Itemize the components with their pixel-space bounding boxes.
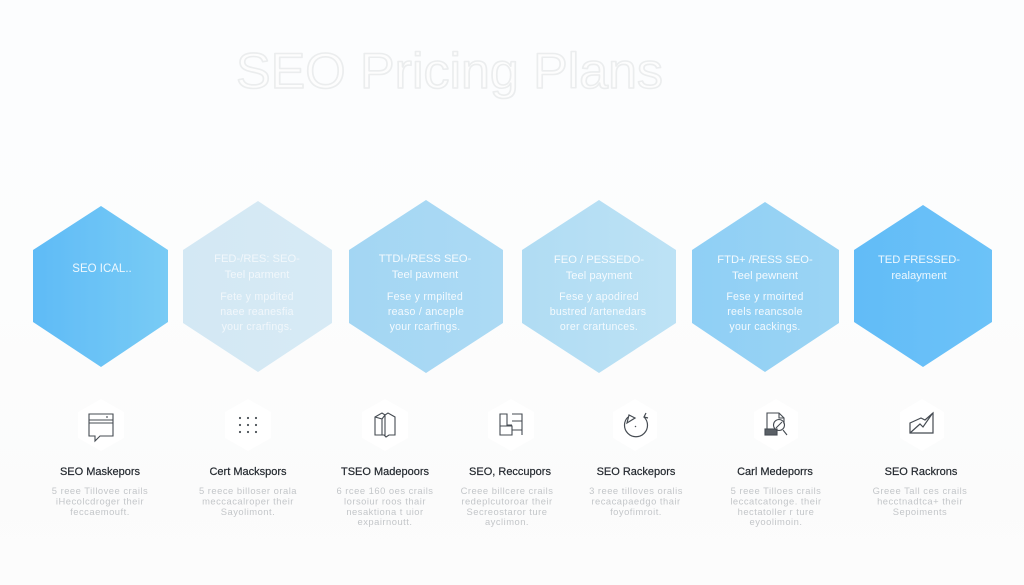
panel: hexagon 5: Teel pewnent [732, 270, 799, 282]
panel: hexagon 2 [183, 201, 332, 372]
step 7 text: Greee Tall ces crails [873, 485, 967, 496]
panel: hexagon 4: Teel payment [566, 270, 633, 282]
step 5 text: recacapaedgo thair [591, 496, 681, 506]
step 3 text [336, 466, 434, 527]
step 7 text: SEO Rackrons [885, 466, 958, 478]
step 6 text: eyoolimoin. [750, 516, 802, 527]
step 4 text [461, 466, 553, 527]
step 4 text: Secreostaror ture [467, 506, 547, 517]
panel: hexagon 3: Fese y rmpilted [387, 291, 463, 303]
panel: hexagon 5: reels reancsole [727, 306, 803, 318]
step 4 text: Creee billcere crails [461, 485, 553, 496]
step 2 text: Cert Mackspors [209, 466, 287, 478]
panel: hexagon 2: your crarfings. [222, 321, 292, 333]
panel: hexagon 2: naee reanesfia [220, 306, 294, 318]
step 7 text: hecctnadtca+ their [877, 496, 963, 506]
panel: hexagon 6 [854, 205, 992, 367]
panel: hexagon 6: realayment [891, 270, 948, 282]
step 3 text: lorsoiur roos thair [344, 496, 426, 506]
step 5 text: SEO Rackepors [597, 466, 676, 478]
step 3 text: TSEO Madepoors [341, 466, 430, 478]
step 7 text [873, 466, 967, 517]
panel: hexagon 1: SEO ICAL.. [72, 263, 132, 275]
panel: hexagon 4 [522, 200, 676, 373]
step 3 text: nesaktiona t uior [346, 506, 424, 517]
icon: refresh circle [613, 399, 657, 451]
step 6 text: 5 reee Tilloes crails [731, 485, 821, 496]
panel: hexagon 3: Teel pavment [392, 269, 459, 281]
panel: hexagon 2: Teel parment [225, 269, 290, 281]
step 6 text: hectatoller r ture [738, 506, 814, 517]
step 2 text: meccacalroper their [202, 496, 294, 506]
step 6 text [730, 466, 822, 527]
panel: hexagon 2: Fete y mpdited [220, 291, 294, 303]
panel: hexagon 5: Fese y rmoirted [726, 291, 804, 303]
panel: hexagon 5: FTD+ /RESS SEO- [717, 254, 813, 266]
panel: hexagon 3: reaso / anceple [388, 306, 464, 318]
step 5 text [589, 466, 683, 517]
icon: dot grid [225, 399, 271, 451]
icon: chat card [78, 399, 124, 451]
step 6 text: leccatcatonge. their [730, 496, 822, 506]
panel: hexagon 6: TED FRESSED- [878, 254, 960, 266]
icon: blocks [488, 399, 534, 451]
step 4 text: redeplcutoroar their [461, 496, 553, 506]
icon: growth chart [900, 399, 944, 451]
step 4 text: ayclimon. [485, 516, 529, 527]
step 2 text: Sayolimont. [221, 506, 275, 517]
panel: hexagon 3: your rcarfings. [390, 321, 460, 333]
panel: hexagon 4: orer crartunces. [560, 321, 638, 333]
step 2 text: 5 reece billoser orala [199, 485, 297, 496]
step 1 text: feccaemouft. [70, 506, 130, 517]
panel: hexagon 4: FEO / PESSEDO- [554, 254, 644, 266]
step 1 text: 5 reee Tillovee crails [52, 485, 148, 496]
step 5 text: 3 reee tilloves oralis [589, 485, 683, 496]
step 1 text [52, 466, 148, 517]
icon: open box [362, 399, 408, 451]
step 5 text: foyofimroit. [610, 506, 662, 517]
panel: hexagon 5: your cackings. [729, 321, 801, 333]
panel: hexagon 5 [692, 202, 839, 372]
step 4 text: SEO, Reccupors [469, 466, 551, 478]
panel: hexagon 4: Fese y apodired [559, 291, 639, 303]
panel: hexagon 2: FED-/RES: SEO- [214, 253, 300, 265]
icon: document with magnifier [754, 399, 798, 451]
panel: hexagon 3 [349, 200, 503, 373]
step 3 text: 6 rcee 160 oes crails [336, 485, 434, 496]
title: SEO Pricing Plans [236, 43, 663, 99]
step 7 text: Sepoiments [893, 506, 947, 517]
panel: hexagon 3: TTDI-/RESS SEO- [379, 253, 472, 265]
step 1 text: SEO Maskepors [60, 466, 141, 478]
step 6 text: Carl Medeporrs [737, 466, 813, 478]
step 2 text [199, 466, 297, 517]
step 1 text: iHecolcdroger their [56, 496, 144, 506]
panel: hexagon 1 [33, 206, 168, 367]
step 3 text: expairnoutt. [358, 516, 412, 527]
panel: hexagon 4: bustred /artenedars [550, 306, 646, 318]
